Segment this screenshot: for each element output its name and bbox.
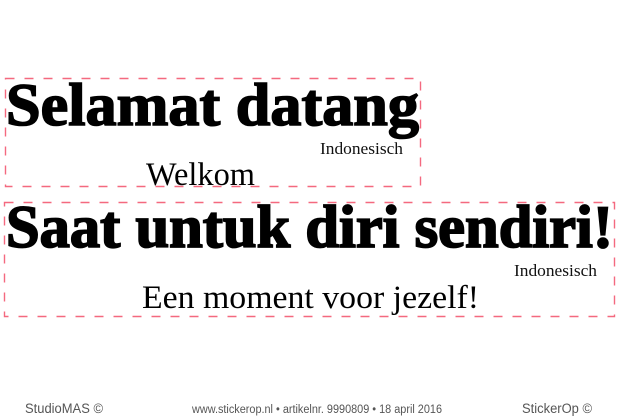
label: language: Indonesisch: [514, 261, 597, 280]
heading: Saat untuk diri sendiri: Saat untuk diri sendiri!: [6, 194, 613, 260]
heading: Selamat datang: Selamat datang: [6, 72, 419, 138]
dashed cut line 2: [4, 202, 614, 316]
footer: studio credit: StudioMAS ©: [25, 401, 103, 416]
footer: article info: www.stickerop.nl • artikelnr. 9990809 • 18 april 2016: [191, 404, 442, 416]
dashed cut line 1: [6, 78, 420, 186]
label: language: Indonesisch: [320, 139, 403, 158]
footer: brand credit: StickerOp ©: [522, 401, 592, 416]
panel: Saat untuk diri sendiri: [4, 194, 614, 316]
panel: Selamat datang: [6, 72, 420, 193]
footer: [25, 401, 592, 416]
translation: Welkom: Welkom: [146, 157, 255, 193]
translation: Een moment voor jezelf: Een moment voor jezelf!: [142, 280, 479, 316]
